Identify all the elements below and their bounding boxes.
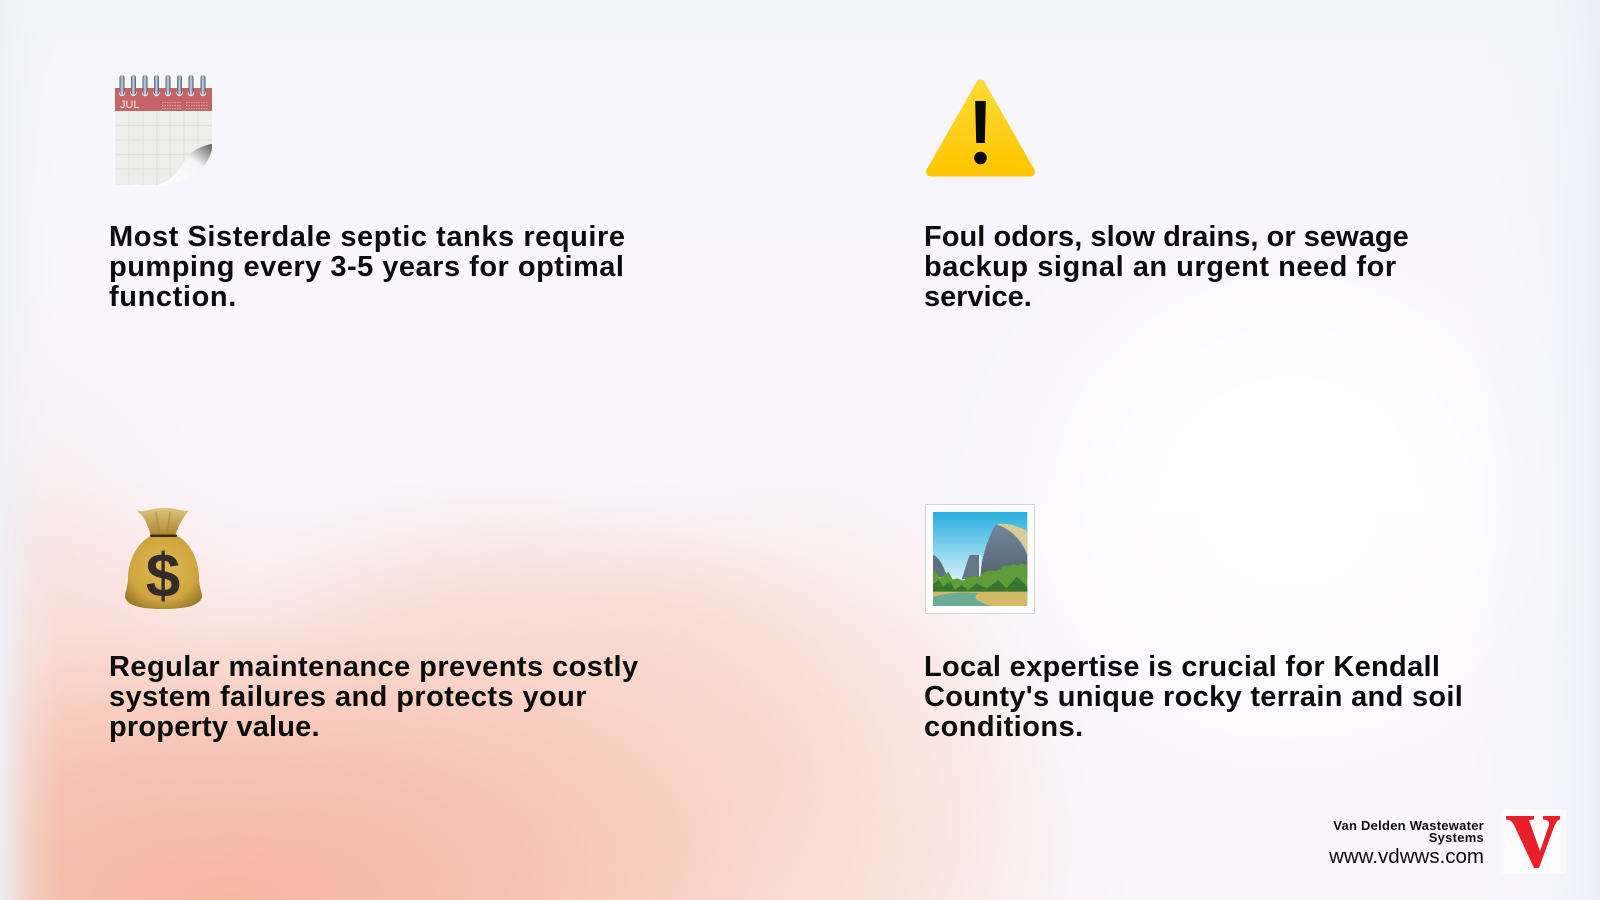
icon: warning sign: [926, 80, 1035, 176]
heading: money fact: property value.: [109, 711, 320, 743]
heading: calendar fact: function.: [109, 281, 237, 313]
heading: money fact: system failures and protects your: [109, 681, 587, 713]
company name: Van Delden Wastewater: [1333, 818, 1484, 833]
icon: money bag: $: [146, 542, 180, 611]
heading: local expertise fact: [924, 651, 1463, 743]
company name: [1333, 818, 1484, 845]
heading: warning fact: backup signal an urgent need for: [924, 251, 1397, 283]
heading: warning fact: service.: [924, 281, 1032, 313]
footer: brand block: [1329, 809, 1566, 874]
icon: national park picture: [925, 504, 1035, 614]
logo tile: [1506, 809, 1566, 874]
icon: spiral calendar: JUL: [120, 99, 140, 111]
icon: money bag: [125, 508, 202, 611]
heading: local expertise fact: Local expertise is crucial for Kendall: [924, 651, 1440, 683]
heading: money fact: Regular maintenance prevents costly: [109, 651, 639, 683]
company name: Systems: [1429, 830, 1484, 845]
website: www.vdwws.com: [1329, 845, 1484, 868]
heading: local expertise fact: conditions.: [924, 711, 1084, 743]
icon: spiral calendar: [115, 75, 212, 185]
heading: warning fact: Foul odors, slow drains, or sewage: [924, 221, 1409, 253]
heading: local expertise fact: County's unique rocky terrain and soil: [924, 681, 1463, 713]
heading: calendar fact: Most Sisterdale septic tanks require: [109, 221, 626, 253]
heading: money fact: [109, 651, 639, 743]
heading: calendar fact: [109, 221, 626, 313]
heading: warning fact: [924, 221, 1409, 313]
heading: calendar fact: pumping every 3-5 years for optimal: [109, 251, 624, 283]
